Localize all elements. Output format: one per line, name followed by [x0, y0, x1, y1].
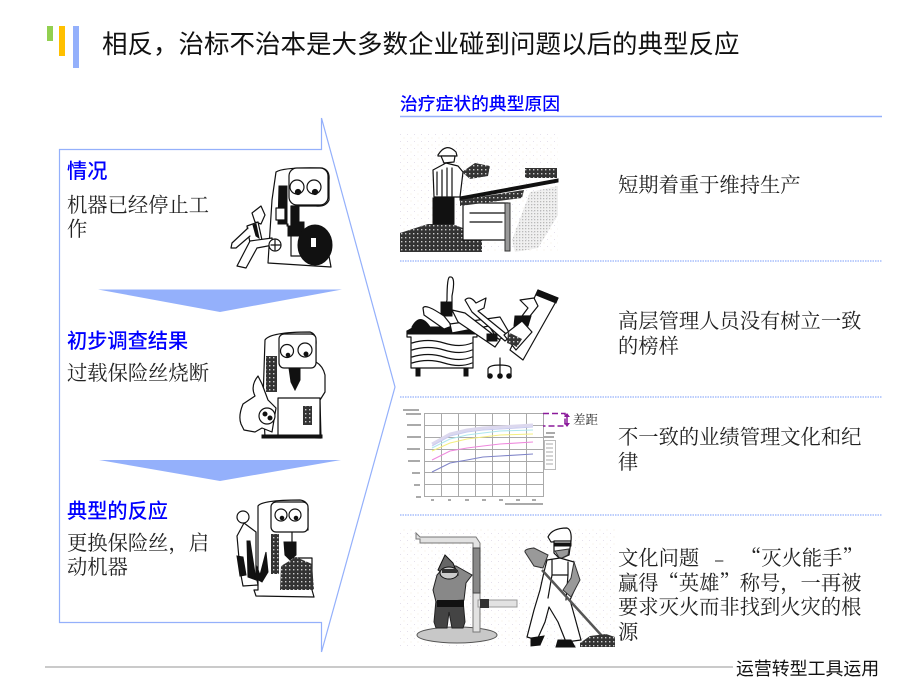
text block: typical response: 动机器	[67, 551, 128, 580]
icon: title accent bars	[47, 26, 79, 68]
text: executives set no example	[618, 305, 861, 359]
heading: typical causes: 治疗症状的典型原因	[400, 90, 560, 116]
divider	[400, 396, 882, 398]
text block: typical response: 典型的反应	[67, 495, 168, 524]
chart: performance gap line chart: 差距	[573, 410, 599, 428]
text block: typical response: 更换保险丝，启	[67, 527, 209, 556]
illustration: worker at conveyor	[400, 134, 558, 252]
text: firefighter culture: 文化问题	[618, 542, 699, 571]
divider	[400, 260, 882, 262]
icon: man restarting machine	[237, 500, 314, 597]
text: firefighter culture: “灭火能手”	[741, 542, 863, 571]
text: short-term production: 短期着重于维持生产	[618, 169, 801, 198]
text block: first findings: 过载保险丝烧断	[67, 357, 209, 386]
arrow: down to typical response	[99, 460, 341, 481]
text: inconsistent performance culture	[618, 421, 861, 475]
text: executives set no example: 的榜样	[618, 330, 679, 359]
footer rule	[45, 666, 733, 668]
text: firefighter culture: 源	[618, 616, 639, 645]
text: firefighter culture: –	[715, 552, 724, 569]
icon: man inspecting machine	[240, 332, 325, 438]
text block: typical response	[67, 495, 209, 580]
arrow: down to first findings	[98, 290, 342, 312]
illustration: firefighters plumber and sweeper	[400, 528, 615, 648]
text: firefighter culture: 要求灭火而非找到火灾的根	[618, 591, 861, 620]
text block: first findings	[67, 325, 209, 386]
title: 相反，治标不治本是大多数企业碰到问题以后的典型反应	[102, 24, 740, 61]
chart: performance gap line chart	[403, 409, 599, 505]
text: firefighter culture	[618, 542, 863, 645]
text: inconsistent performance culture: 律	[618, 446, 638, 475]
heading rule	[400, 116, 882, 118]
text block: first findings: 初步调查结果	[67, 325, 188, 354]
icon: man kicking machine	[231, 168, 332, 268]
footer label: 运营转型工具运用	[736, 655, 879, 681]
illustration: executive with feet on desk	[407, 277, 558, 378]
text: firefighter culture: 赢得“英雄”称号，一再被	[618, 567, 861, 596]
text: executives set no example: 高层管理人员没有树立一致	[618, 305, 861, 334]
text block: situation: 作	[67, 213, 87, 242]
divider	[400, 514, 882, 516]
text block: situation: 情况	[67, 155, 107, 184]
text block: situation	[67, 155, 209, 242]
text: inconsistent performance culture: 不一致的业绩管理文化和纪	[618, 421, 861, 450]
text block: situation: 机器已经停止工	[67, 189, 209, 218]
panel: situation pentagon outline	[60, 118, 395, 652]
